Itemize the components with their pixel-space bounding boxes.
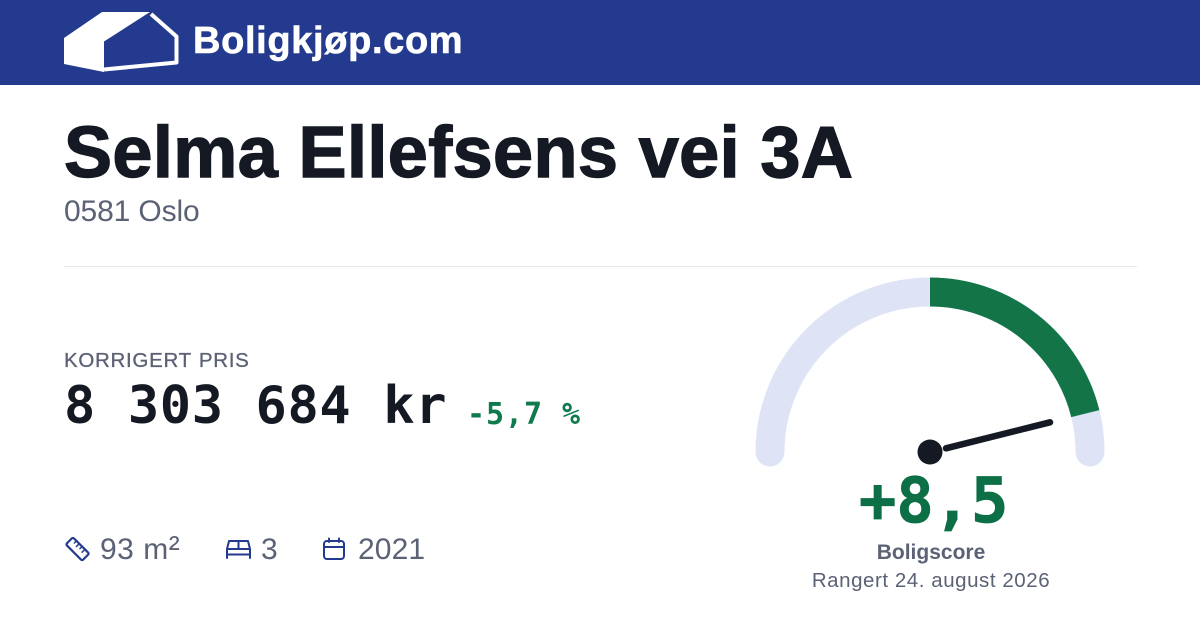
logo wordmark: Boligkjøp.com bbox=[193, 20, 463, 62]
icon: ruler bbox=[65, 536, 90, 562]
property facts bbox=[65, 529, 425, 566]
postal address: 0581 Oslo bbox=[64, 195, 200, 228]
year built: 2021 bbox=[358, 533, 425, 566]
icon: bed bbox=[226, 540, 251, 559]
gauge track bbox=[770, 292, 1090, 452]
ranking date: Rangert 24. august 2026 bbox=[812, 569, 1050, 592]
title: Selma Ellefsens vei 3A bbox=[64, 113, 853, 193]
icon: house logo bbox=[64, 12, 178, 72]
gauge value arc bbox=[930, 292, 1085, 414]
bedrooms: 3 bbox=[261, 533, 278, 566]
gauge chart bbox=[756, 278, 1104, 466]
price change: -5,7 % bbox=[467, 397, 581, 432]
score label: Boligscore bbox=[877, 541, 985, 564]
corrected price: 8 303 684 kr bbox=[64, 376, 447, 436]
gauge needle bbox=[918, 422, 1050, 464]
icon: calendar bbox=[323, 538, 345, 560]
area: 93 m² bbox=[100, 529, 180, 566]
price label: KORRIGERT PRIS bbox=[64, 349, 249, 372]
header banner bbox=[0, 0, 1200, 85]
